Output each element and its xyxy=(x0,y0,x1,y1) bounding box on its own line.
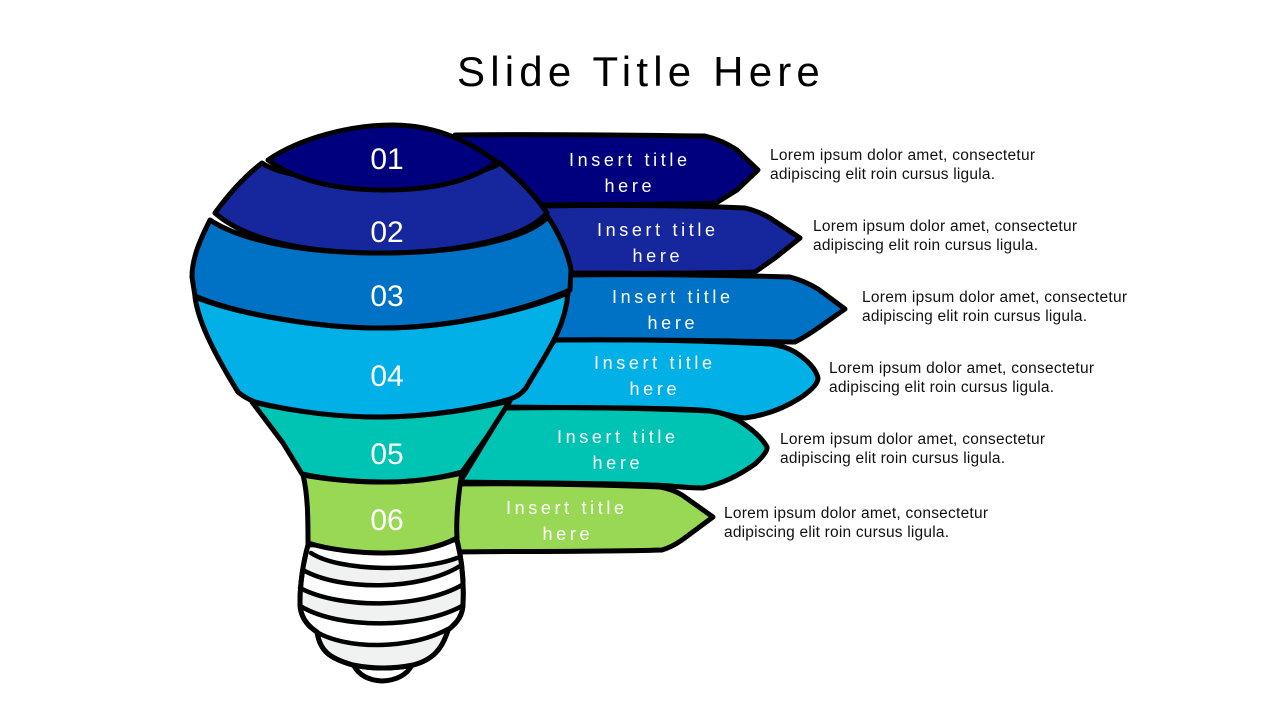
arrow 04: Insert title xyxy=(594,353,712,373)
description 05: Lorem ipsum dolor amet, consectetur xyxy=(780,431,1045,448)
description 01: adipiscing elit roin cursus ligula. xyxy=(770,166,995,183)
arrow 03 xyxy=(555,275,845,342)
description 01 xyxy=(770,147,1035,183)
segment numbers: 01 xyxy=(370,143,404,176)
arrow 05: here xyxy=(592,453,640,473)
arrow 02: Insert title xyxy=(597,220,715,240)
light bulb xyxy=(192,125,571,681)
description 03: adipiscing elit roin cursus ligula. xyxy=(862,308,1087,325)
description 02: Lorem ipsum dolor amet, consectetur xyxy=(813,218,1077,235)
description 03 xyxy=(862,289,1127,325)
segment numbers: 04 xyxy=(370,360,404,393)
arrow 06: Insert title xyxy=(506,498,624,518)
arrow 01: here xyxy=(604,176,652,196)
segment 05 xyxy=(252,401,510,482)
arrow 06: here xyxy=(542,524,590,544)
description 03: Lorem ipsum dolor amet, consectetur xyxy=(862,289,1127,306)
segment 03 xyxy=(192,217,571,328)
segment numbers: 06 xyxy=(370,504,404,537)
segment numbers: 05 xyxy=(370,438,404,471)
arrow 02 xyxy=(540,205,800,273)
segment 02 xyxy=(215,163,547,253)
segment numbers: 03 xyxy=(370,280,404,313)
arrow 03: Insert title xyxy=(612,287,730,307)
segment numbers: 02 xyxy=(370,216,404,249)
segment 06 xyxy=(303,473,462,553)
arrow 01 xyxy=(455,135,758,205)
description 06: Lorem ipsum dolor amet, consectetur xyxy=(724,505,988,522)
arrow 04: here xyxy=(630,379,676,399)
description 04: adipiscing elit roin cursus ligula. xyxy=(829,379,1054,396)
title: Slide Title Here xyxy=(457,48,825,95)
description 02: adipiscing elit roin cursus ligula. xyxy=(813,237,1038,254)
arrow 06 xyxy=(455,484,713,552)
description 02 xyxy=(813,218,1077,254)
segment 01 xyxy=(268,125,497,190)
description 01: Lorem ipsum dolor amet, consectetur xyxy=(770,147,1035,164)
arrow 01: Insert title xyxy=(569,150,687,170)
description 05 xyxy=(780,431,1045,467)
arrow 02: here xyxy=(632,246,680,266)
lamp base xyxy=(300,540,463,681)
arrow 05: Insert title xyxy=(557,427,675,447)
arrow banners xyxy=(455,135,845,552)
description 04: Lorem ipsum dolor amet, consectetur xyxy=(829,360,1094,377)
description 06: adipiscing elit roin cursus ligula. xyxy=(724,524,949,541)
description 05: adipiscing elit roin cursus ligula. xyxy=(780,450,1005,467)
segment 04 xyxy=(195,293,568,417)
arrow 05 xyxy=(460,408,767,488)
segment numbers xyxy=(370,143,404,537)
arrow 04 xyxy=(505,340,818,418)
arrow 03: here xyxy=(648,313,694,333)
description 06 xyxy=(724,505,988,541)
description 04 xyxy=(829,360,1094,396)
